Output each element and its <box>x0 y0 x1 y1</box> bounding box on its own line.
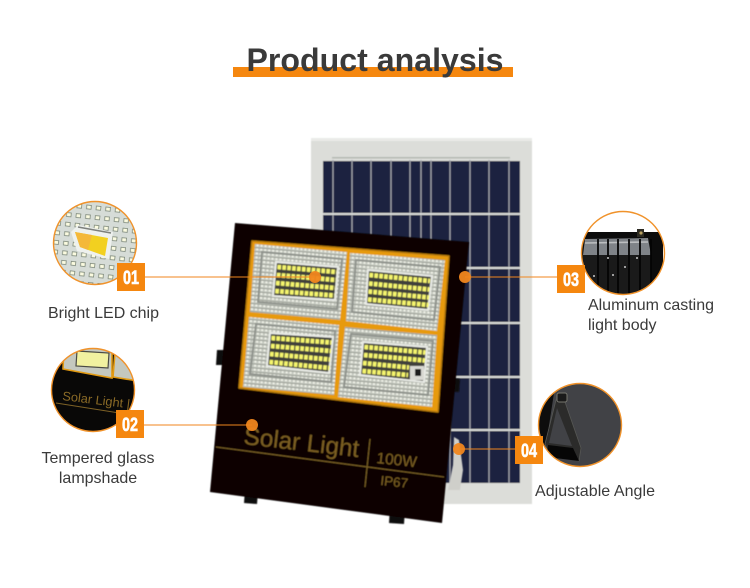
callout 03: Aluminum casting light body <box>459 210 714 334</box>
marker dot 01 <box>309 271 321 283</box>
label: Tempered glass lampshade: Tempered glass <box>42 450 154 467</box>
marker dot 04 <box>453 443 465 455</box>
icon: LED chip close-up <box>52 200 138 286</box>
label: Bright LED chip: Bright LED chip <box>48 305 159 322</box>
lens panels <box>250 244 347 320</box>
title: Product analysis: Product analysis <box>246 42 504 78</box>
badge 01: 01 <box>123 268 139 289</box>
label: Aluminum casting light body <box>588 297 714 334</box>
label: Tempered glass lampshade: lampshade <box>59 470 137 487</box>
chrome reflector rims <box>250 252 440 395</box>
callout 01: Bright LED chip <box>48 198 321 322</box>
label: Adjustable Angle: Adjustable Angle <box>535 483 655 500</box>
LED rows <box>275 267 336 296</box>
callout 04: Adjustable Angle <box>453 380 655 500</box>
label: Aluminum casting light body: light body <box>588 317 656 334</box>
LED boards <box>273 262 338 300</box>
badge 04: 04 <box>521 441 537 462</box>
icon: aluminum fins close-up <box>580 210 666 296</box>
lamp lettering <box>242 423 418 491</box>
label: Tempered glass lampshade <box>42 450 154 487</box>
floodlight body <box>210 223 469 524</box>
badge 02: 02 <box>122 415 138 436</box>
orange lens frame <box>239 241 449 412</box>
badge 03: 03 <box>563 270 579 291</box>
side and edge clips <box>216 350 460 524</box>
lamp lettering: 100W <box>376 450 418 471</box>
leader line 04 <box>459 448 515 450</box>
solar panel <box>311 138 532 504</box>
icon: glass close-up: Solar Light | <box>62 389 131 411</box>
callout 02: Tempered glass lampshade <box>42 345 258 487</box>
leader line 03 <box>465 276 557 278</box>
leader line 02 <box>144 424 252 426</box>
badge 02 <box>116 410 144 438</box>
lamp lettering: Solar Light <box>242 423 361 463</box>
sensor chip <box>410 366 424 380</box>
lamp lettering: IP67 <box>380 473 409 491</box>
badge 03 <box>557 265 585 293</box>
badge 01 <box>117 263 145 291</box>
leader line 01 <box>145 276 315 278</box>
icon: glass close-up <box>50 348 136 432</box>
badge 04 <box>515 436 543 464</box>
label: Aluminum casting light body: Aluminum casting <box>588 297 714 314</box>
marker dot 03 <box>459 271 471 283</box>
icon: adjustable bracket close-up <box>538 382 622 468</box>
mounting bracket behind body <box>448 437 463 490</box>
marker dot 02 <box>246 419 258 431</box>
